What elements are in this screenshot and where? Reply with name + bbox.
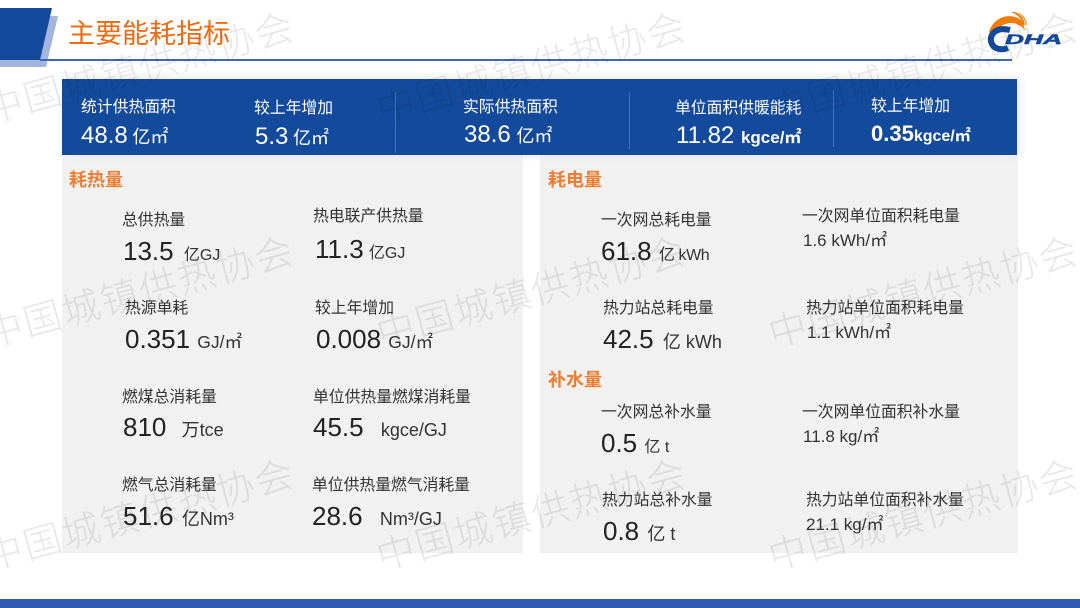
- metric: yoy increase: 0.008 GJ/㎡: [316, 324, 433, 354]
- panel: summary banner: [62, 79, 1017, 155]
- metric: station electricity: [603, 299, 722, 354]
- metric: station unit water: 热力站单位面积补水量: [806, 492, 964, 509]
- metric: unit gas: 28.6 Nm³/GJ: [312, 501, 442, 531]
- heading: heat consumption: 耗热量: [69, 170, 123, 190]
- metric: area yoy increase: 5.3 亿㎡: [255, 123, 329, 150]
- metric: primary network unit water: 11.8 kg/㎡: [803, 427, 879, 446]
- metric: station unit electricity: 热力站单位面积耗电量: [806, 300, 964, 317]
- metric: total heat supply: 总供热量: [122, 212, 185, 229]
- metric: primary network unit water: [802, 403, 960, 446]
- metric: station water: 热力站总补水量: [602, 492, 713, 509]
- heading: make-up water: 补水量: [548, 370, 602, 390]
- metric: station unit electricity: [806, 299, 964, 342]
- divider 3: [833, 90, 834, 147]
- panel: left background: [62, 155, 523, 553]
- metric: CHP heat supply: [313, 207, 424, 264]
- watermarks: 中国城镇供热协会: [764, 6, 1080, 132]
- metric: energy yoy increase: 较上年增加: [871, 98, 950, 115]
- metric: total heat supply: 13.5 亿GJ: [123, 236, 220, 266]
- footer bar: [0, 599, 1080, 608]
- metric: primary network unit electricity: 一次网单位面积耗电量: [802, 208, 960, 225]
- metric: total heating area: 统计供热面积: [81, 99, 176, 116]
- metric: primary network unit electricity: [802, 207, 960, 250]
- metric: primary network water: [601, 403, 712, 458]
- metric: total gas: [122, 476, 234, 531]
- metric: station unit water: 21.1 kg/㎡: [806, 515, 884, 534]
- metric: actual heating area: [463, 98, 558, 148]
- metric: actual heating area: 实际供热面积: [463, 99, 558, 116]
- metric: station unit electricity: 1.1 kWh/㎡: [807, 323, 891, 342]
- metric: primary network electricity: 一次网总耗电量: [601, 212, 712, 229]
- metric: unit area heating energy: 单位面积供暖能耗: [675, 100, 801, 117]
- metric: unit coal: 单位供热量燃煤消耗量: [313, 389, 471, 406]
- metric: total heat supply: [122, 212, 220, 266]
- metric: heat source unit consumption: 热源单耗: [125, 300, 188, 317]
- divider 1: [395, 93, 396, 153]
- metric: total coal: [122, 388, 224, 442]
- metric: total gas: 燃气总消耗量: [122, 477, 217, 494]
- metric: primary network electricity: [601, 212, 712, 266]
- header banner shape: [0, 8, 1012, 67]
- metric: station electricity: 热力站总耗电量: [603, 300, 714, 317]
- divider 2: [629, 92, 630, 149]
- heading: electricity consumption: 耗电量: [548, 170, 602, 190]
- metric: unit area heating energy: 11.82 kgce/㎡: [676, 122, 801, 149]
- metric: unit coal: [313, 388, 471, 442]
- icon: blue C: [991, 29, 1010, 49]
- metric: station water: 0.8 亿 t: [603, 516, 675, 546]
- metric: energy yoy increase: [871, 97, 971, 146]
- watermarks: 中国城镇供热协会: [372, 6, 692, 132]
- metric: yoy increase: 较上年增加: [315, 300, 394, 317]
- metric: energy yoy increase: 0.35kgce/㎡: [871, 121, 971, 146]
- metric: unit gas: 单位供热量燃气消耗量: [312, 477, 470, 494]
- panel: right background: [540, 155, 1018, 553]
- metric: total coal: 810 万tce: [123, 412, 224, 442]
- watermarks: 中国城镇供热协会: [764, 230, 1080, 356]
- metric: station water: [602, 491, 713, 546]
- metric: primary network water: 一次网总补水量: [601, 404, 712, 421]
- metric: yoy increase: [315, 299, 433, 354]
- metric: primary network unit water: 一次网单位面积补水量: [802, 404, 960, 421]
- watermarks: 中国城镇供热协会: [764, 453, 1080, 579]
- logo: [988, 12, 1062, 52]
- metric: heat source unit consumption: [125, 300, 242, 354]
- metric: area yoy increase: 较上年增加: [254, 100, 333, 117]
- metric: total coal: 燃煤总消耗量: [122, 389, 217, 406]
- metric: total heating area: [81, 98, 176, 149]
- metric: primary network electricity: 61.8 亿 kWh: [601, 236, 709, 266]
- watermarks: 中国城镇供热协会: [372, 230, 692, 356]
- metric: actual heating area: 38.6 亿㎡: [464, 121, 552, 148]
- metric: total gas: 51.6 亿Nm³: [123, 501, 234, 531]
- metric: CHP heat supply: 11.3 亿GJ: [315, 234, 405, 264]
- metric: station unit water: [806, 491, 964, 534]
- metric: area yoy increase: [254, 99, 333, 150]
- metric: unit gas: [312, 476, 470, 531]
- metric: unit coal: 45.5 kgce/GJ: [313, 412, 447, 442]
- metric: heat source unit consumption: 0.351 GJ/㎡: [125, 324, 242, 354]
- metric: station electricity: 42.5 亿 kWh: [603, 324, 722, 354]
- metric: primary network water: 0.5 亿 t: [601, 428, 669, 458]
- title: 主要能耗指标: [68, 19, 230, 49]
- logo letters: DHA: [1005, 31, 1062, 47]
- watermarks: 中国城镇供热协会: [372, 453, 692, 579]
- metric: primary network unit electricity: 1.6 kWh/㎡: [803, 231, 887, 250]
- metric: total heating area: 48.8 亿㎡: [81, 122, 168, 149]
- icon: orange arcs: [989, 12, 1027, 35]
- metric: CHP heat supply: 热电联产供热量: [313, 208, 424, 225]
- metric: unit area heating energy: [675, 99, 802, 149]
